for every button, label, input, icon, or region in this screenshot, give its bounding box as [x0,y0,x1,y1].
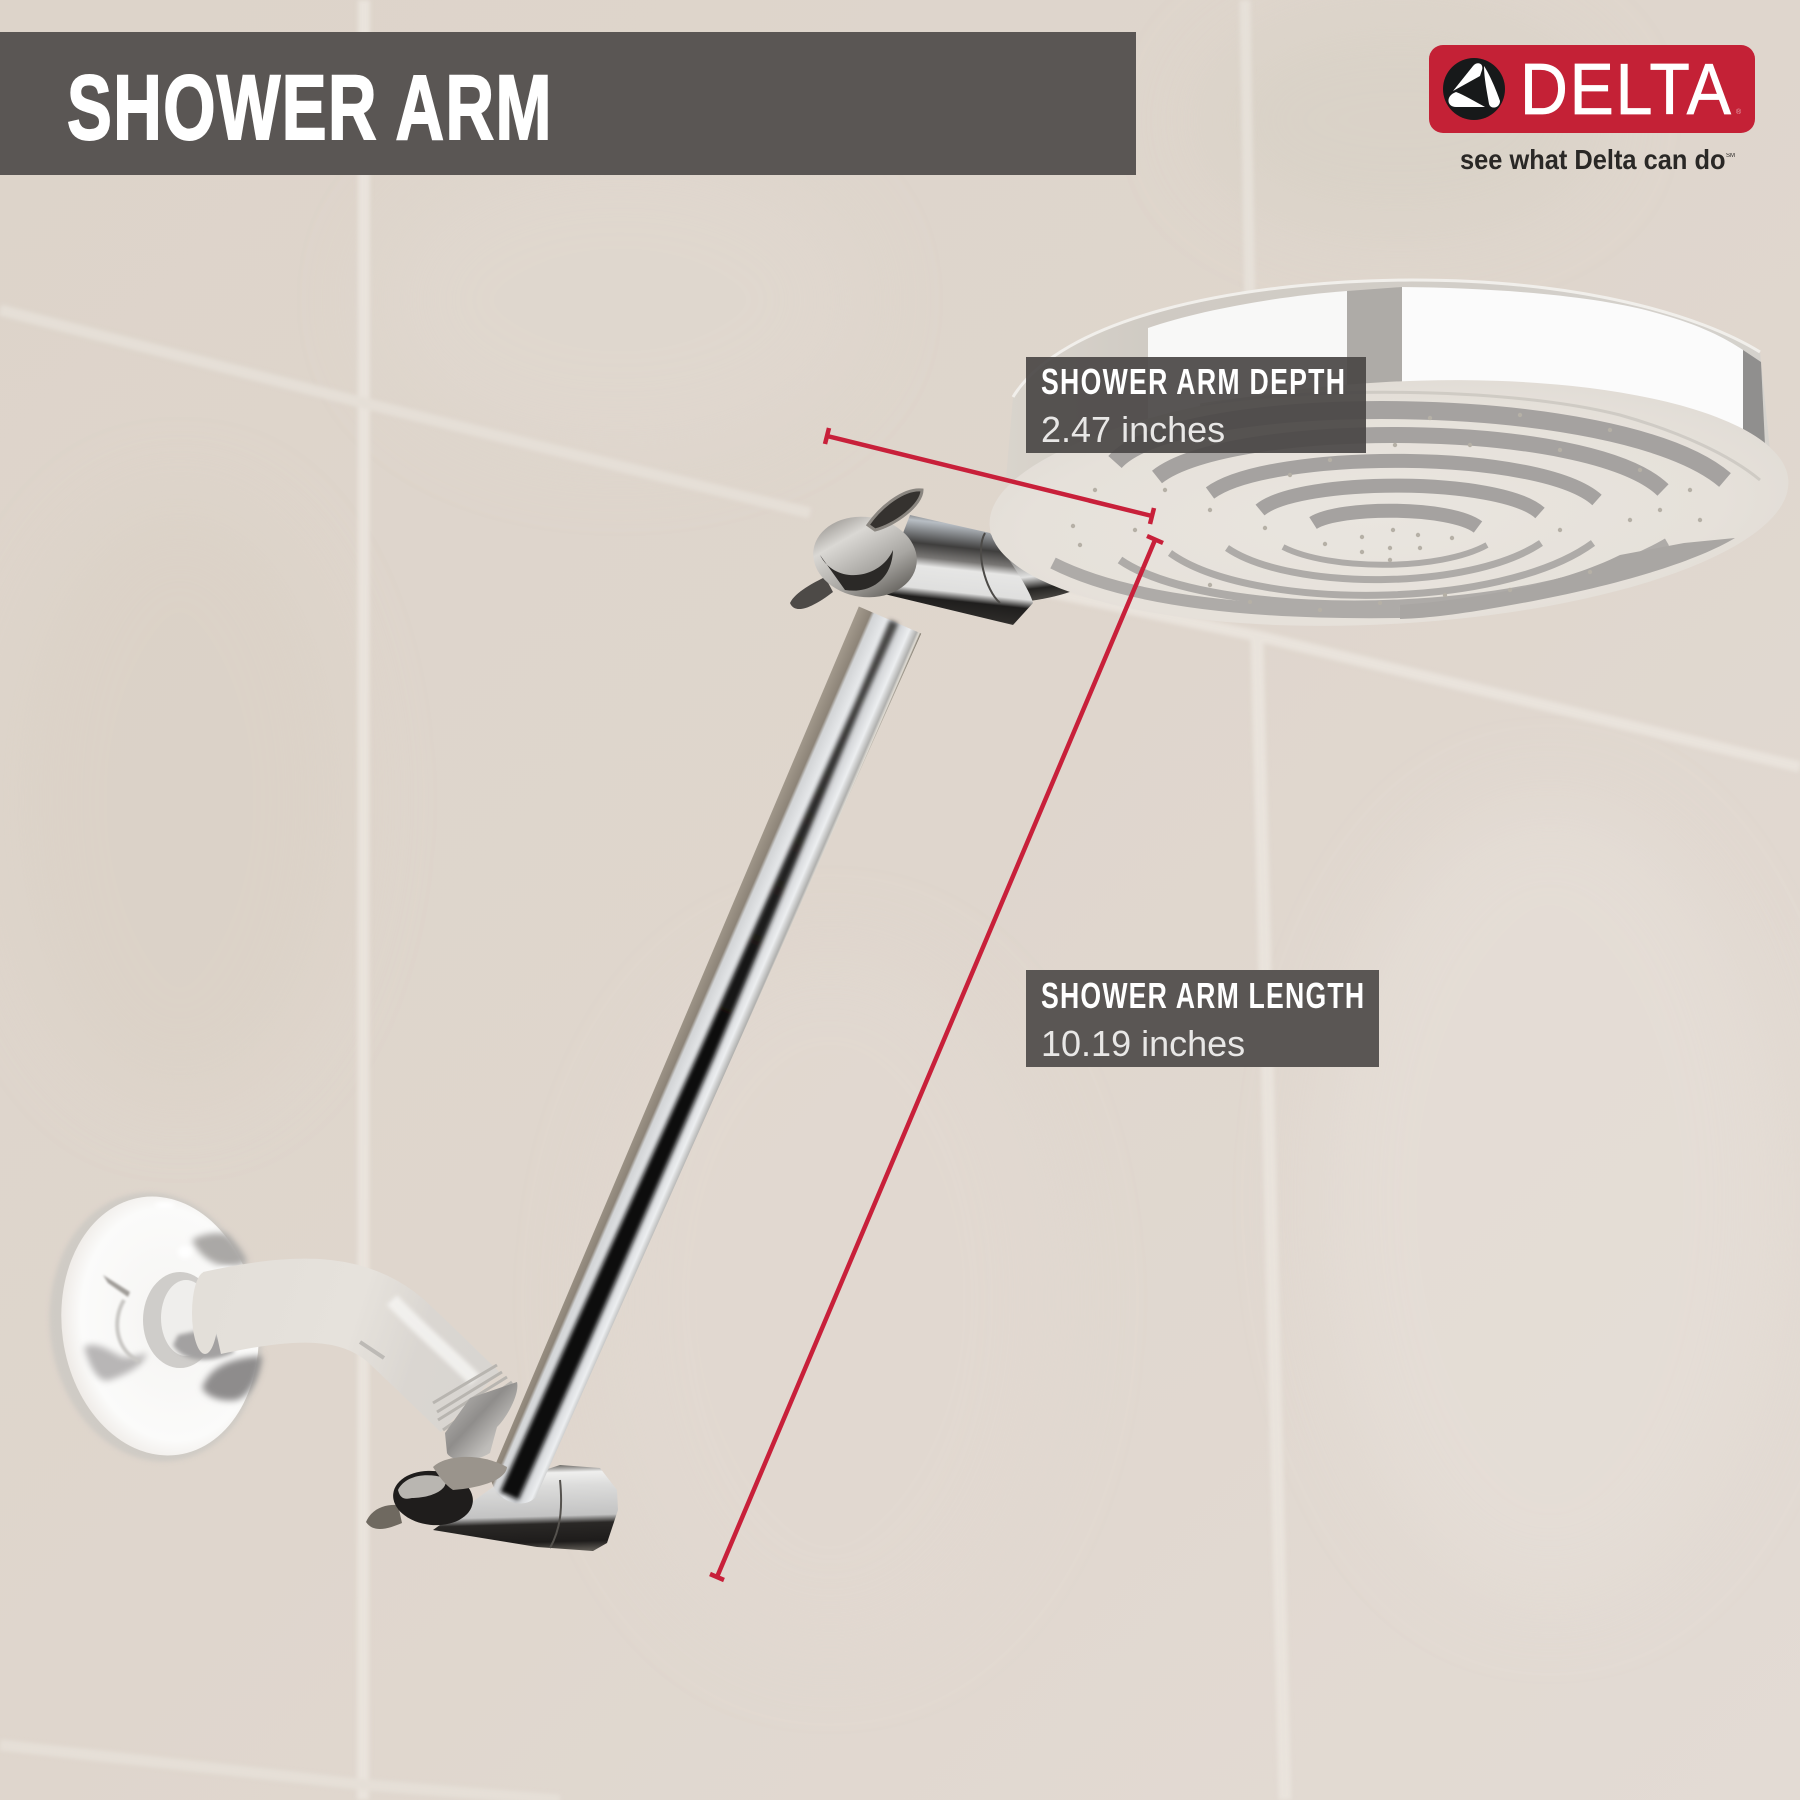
Delta logo [1429,45,1755,175]
callout: shower arm depth: 2.47 inches [1041,409,1225,450]
Delta logo: DELTA [1520,48,1733,130]
spray nozzles [1071,413,1702,612]
head body [1006,281,1772,520]
title banner [0,32,1136,175]
callout: shower arm depth: SHOWER ARM DEPTH [1041,361,1346,402]
lower swivel bracket [433,1465,618,1551]
curved wall arm [192,1272,517,1460]
dimension: length [710,536,1163,1580]
lower recess rings [1053,542,1667,612]
adjustable arm tube [476,606,921,1514]
dimension: depth [825,428,1154,524]
upper recess rings [1115,410,1725,527]
callout: shower arm length: 10.19 inches [1041,1023,1245,1064]
threads [433,1365,512,1430]
lower knob [366,1457,507,1529]
tagline: see what Delta can do [1460,144,1726,175]
callout: shower arm depth [1026,357,1366,453]
title: SHOWER ARM [67,57,553,160]
head face [983,360,1795,646]
wall flange [32,1179,280,1475]
callout: shower arm length: SHOWER ARM LENGTH [1041,975,1365,1016]
threaded collar [445,1382,517,1460]
Delta logo: SM [1726,153,1735,159]
Delta logo: ® [1736,108,1742,116]
callout: shower arm length [1026,970,1379,1067]
upper swivel bracket [790,490,1075,625]
shower arm assembly [32,490,1075,1551]
shower head [983,280,1795,646]
icon: Delta triangle mark [1443,58,1505,120]
